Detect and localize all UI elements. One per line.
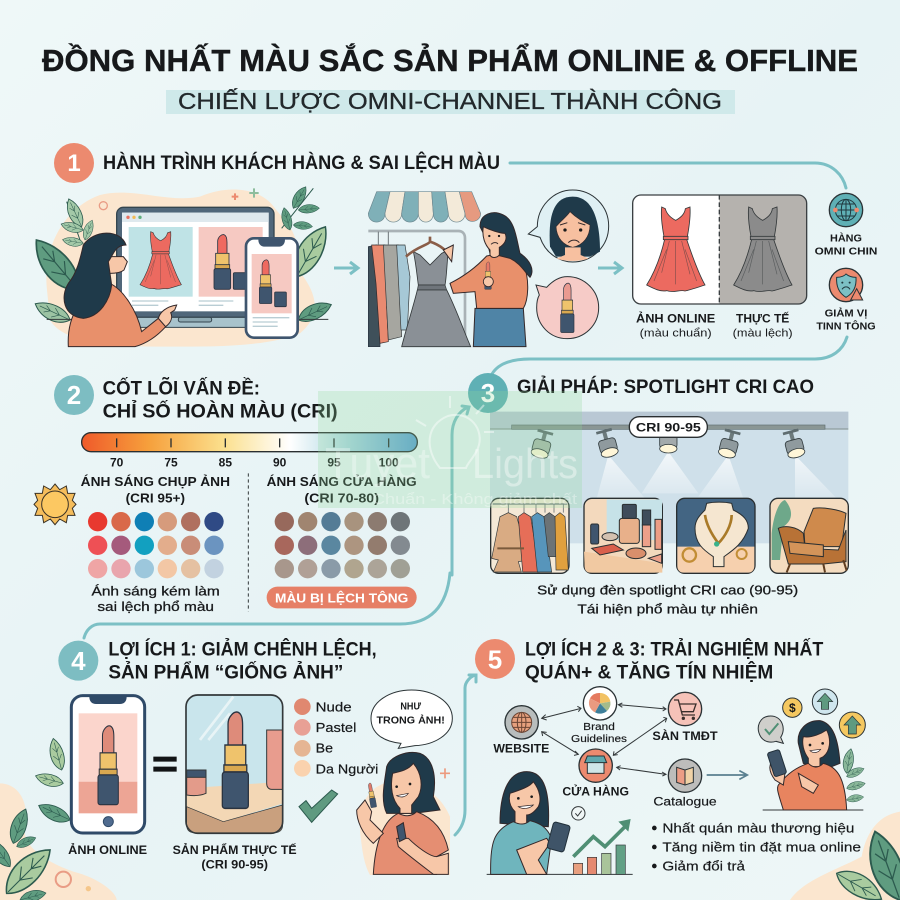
icon: reduced trust shield: [816, 268, 876, 332]
comparison: online vs real dress: [633, 195, 807, 340]
icon: omni channel globe: [815, 193, 877, 257]
comparison: online vs real dress: ẢNH ONLINE: [636, 311, 715, 326]
number badge 2: [54, 375, 94, 415]
caption: Sử dụng đèn spotlight CRI cao (90-95): [537, 582, 798, 597]
colour tone list: Nude: [316, 699, 352, 714]
icon: omni channel globe: HÀNG: [830, 234, 862, 245]
flow connector lines: [84, 163, 847, 835]
heading 3: GIẢI PHÁP: SPOTLIGHT CRI CAO: [517, 376, 814, 398]
CRI scale bar: 75: [164, 456, 178, 470]
heading 5: [525, 639, 824, 683]
benefits list: [652, 821, 861, 874]
icon: sun: [34, 484, 76, 525]
speech bubble: TRONG ẢNH!: [376, 713, 445, 726]
happy customer with trust icons: [758, 689, 866, 810]
panels: clothes, cosmetics, jewelry, furniture: [491, 498, 848, 616]
speech bubble: worried face: [528, 190, 609, 262]
corner decoration bottom left: [0, 783, 117, 900]
colour tone list: Da Người: [316, 761, 378, 776]
benefits list: Tăng niềm tin đặt mua online: [662, 840, 861, 855]
comparison: online vs real dress: (màu lệch): [733, 328, 793, 340]
benefits list: Giảm đổi trả: [662, 859, 746, 874]
corner decoration bottom right: [790, 812, 900, 900]
illustration: clothing store: [368, 192, 532, 347]
node: store: CỬA HÀNG: [562, 784, 629, 799]
speech bubble: lipstick: [536, 277, 599, 339]
CRI scale bar: 70: [110, 456, 124, 470]
CRI scale bar: 85: [219, 456, 232, 470]
section 4: benefit 1: [0, 639, 452, 900]
title: ĐỒNG NHẤT MÀU SẮC SẢN PHẨM ONLINE & OFFLINE: [42, 42, 858, 78]
number badge 4: 4: [71, 646, 86, 676]
heading 2: CỐT LÕI VẤN ĐỀ:: [103, 377, 260, 399]
watermark: [318, 391, 582, 508]
bubble icon: up arrow blue: [812, 689, 838, 714]
number badge 2: 2: [67, 380, 81, 410]
left column: photo light: Ánh sáng kém làm: [91, 584, 220, 599]
left column: photo light: sai lệch phổ màu: [97, 599, 214, 614]
heading 1: HÀNH TRÌNH KHÁCH HÀNG & SAI LỆCH MÀU: [103, 152, 500, 174]
arrow: [598, 262, 622, 274]
CRI scale bar: 90: [273, 456, 287, 470]
right column: store light: [267, 474, 417, 608]
phone with online image: [71, 696, 145, 833]
woman with phone and growth chart: [487, 772, 633, 874]
comparison: online vs real dress: (màu chuẩn): [640, 328, 712, 340]
subtitle with highlight: CHIẾN LƯỢC OMNI-CHANNEL THÀNH CÔNG: [178, 87, 722, 114]
node: brand guidelines: [571, 687, 627, 745]
left column: photo light: [81, 474, 230, 614]
bubble icon: up arrow yellow: [839, 712, 865, 738]
section 5: benefit 2 and 3: [475, 639, 900, 900]
node: website: WEBSITE: [493, 742, 549, 756]
left column: photo light: (CRI 95+): [126, 491, 185, 506]
heading 5: LỢI ÍCH 2 & 3: TRẢI NGHIỆM NHẤT: [525, 639, 824, 661]
number badge 4: [58, 641, 98, 681]
colour tone list: Be: [316, 741, 333, 756]
lighting scene: [490, 412, 848, 543]
section 2: CRI: [34, 375, 417, 614]
comparison: online vs real dress: THỰC TẾ: [736, 311, 789, 326]
benefits list: Nhất quán màu thương hiệu: [662, 821, 854, 836]
node: marketplace: SÀN TMĐT: [652, 728, 718, 743]
node: store: [562, 749, 629, 799]
colour tone list: Pastel: [316, 720, 356, 735]
bubble icon: dollar: $: [789, 701, 796, 715]
node: brand guidelines: Brand: [583, 722, 615, 733]
leaves behind phone: [34, 737, 73, 827]
panel: clothes: [491, 498, 569, 573]
section 1: customer journey: [26, 143, 877, 347]
icon: omni channel globe: OMNI CHIN: [815, 246, 877, 257]
node: website: [493, 706, 549, 756]
right column: store light: MÀU BỊ LỆCH TÔNG: [275, 590, 408, 605]
labels under product images: ẢNH ONLINE: [68, 842, 147, 857]
labels under product images: (CRI 90-95): [201, 857, 268, 871]
number badge 1: [54, 143, 94, 183]
heading 2: CHỈ SỐ HOÀN MÀU (CRI): [103, 400, 338, 422]
panel: furniture: [770, 498, 848, 573]
right column: store light: (CRI 70-80): [304, 491, 379, 506]
icon: reduced trust shield: GIẢM VỊ: [825, 308, 868, 320]
CRI scale bar: [82, 433, 417, 470]
caption: Tái hiện phổ màu tự nhiên: [577, 601, 758, 616]
number badge 5: [475, 639, 515, 679]
speech bubble: NHƯ: [400, 701, 422, 712]
labels under product images: SẢN PHẨM THỰC TẾ: [173, 842, 297, 857]
arrow: [334, 262, 358, 274]
caption: [537, 582, 798, 616]
woman with lipstick: [357, 752, 450, 875]
real product photo: [186, 695, 283, 833]
watermark: Chuẩn - Không giảm chất: [372, 491, 578, 508]
heading 5: QUÁN+ & TĂNG TÍN NHIỆM: [525, 661, 773, 683]
panel: jewelry: [677, 498, 755, 573]
number badge 3: 3: [481, 378, 495, 408]
node: catalogue: [653, 759, 717, 808]
equals sign: [153, 757, 177, 772]
number badge 1: 1: [67, 150, 81, 177]
CRI scale bar: 95: [327, 456, 341, 470]
bubble icon: check: [758, 716, 783, 743]
lighting scene: CRI 90-95: [636, 421, 701, 435]
panel: cosmetics: [584, 498, 662, 573]
labels under product images: [68, 842, 297, 871]
node: marketplace: [652, 692, 718, 743]
right column: store light: ÁNH SÁNG CỬA HÀNG: [267, 474, 417, 489]
icon: reduced trust shield: TINN TÔNG: [816, 320, 876, 332]
left column: photo light: ÁNH SÁNG CHỤP ẢNH: [81, 474, 230, 489]
CRI scale bar: 100: [379, 456, 399, 470]
number badge 5: 5: [488, 644, 502, 674]
illustration: online shopping: [26, 184, 335, 347]
speech bubble: [371, 690, 452, 748]
arrow to customer: [707, 771, 747, 779]
channel network arrows: [542, 703, 667, 776]
heading 4: [108, 639, 377, 683]
heading 4: LỢI ÍCH 1: GIẢM CHÊNH LỆCH,: [108, 639, 377, 661]
check mark: [299, 790, 338, 822]
node: catalogue: Catalogue: [653, 795, 717, 808]
heading 4: SẢN PHẨM “GIỐNG ẢNH”: [108, 661, 343, 683]
woman at laptop: [64, 233, 177, 347]
section 3: solution: [490, 412, 848, 543]
watermark: Lights: [472, 440, 578, 487]
colour tone list: [294, 698, 378, 777]
node: brand guidelines: Guidelines: [571, 734, 627, 745]
number badge 3: [468, 373, 508, 413]
watermark: Tuyet: [325, 439, 430, 488]
shopper woman: [443, 213, 532, 347]
heading 2: [103, 377, 338, 422]
